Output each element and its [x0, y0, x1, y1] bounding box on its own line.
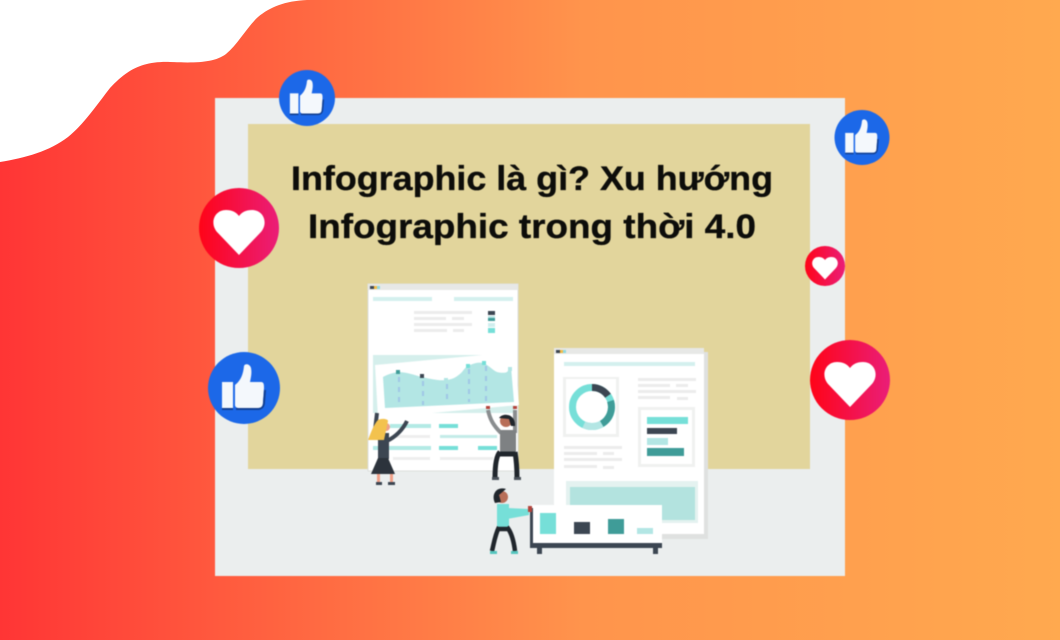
- title: [291, 160, 773, 246]
- illustration: report page two: [554, 348, 708, 539]
- illustration: bar chart cart: [530, 505, 662, 554]
- icon: heart left: [199, 188, 279, 268]
- illustration: tilted area chart: [373, 352, 519, 418]
- illustration: person pushing cart: [490, 488, 532, 554]
- illustration: man lifting chart: [486, 406, 521, 480]
- panel: beige title board: [248, 124, 810, 469]
- icon: heart lower right: [810, 340, 890, 420]
- illustration: report page one: [368, 284, 518, 471]
- title: Infographic là gì? Xu hướng: [291, 160, 773, 198]
- donut chart: [572, 387, 612, 426]
- icon: thumbs up lower left: [208, 352, 280, 424]
- panel: light grey frame: [215, 98, 845, 576]
- illustration: woman with blonde hair: [368, 413, 407, 485]
- icon: thumbs up top left: [279, 70, 335, 126]
- icon: thumbs up top right: [834, 110, 890, 165]
- icon: small heart right: [805, 246, 845, 286]
- white wave corner: [0, 0, 307, 162]
- title: Infographic trong thời 4.0: [308, 208, 756, 246]
